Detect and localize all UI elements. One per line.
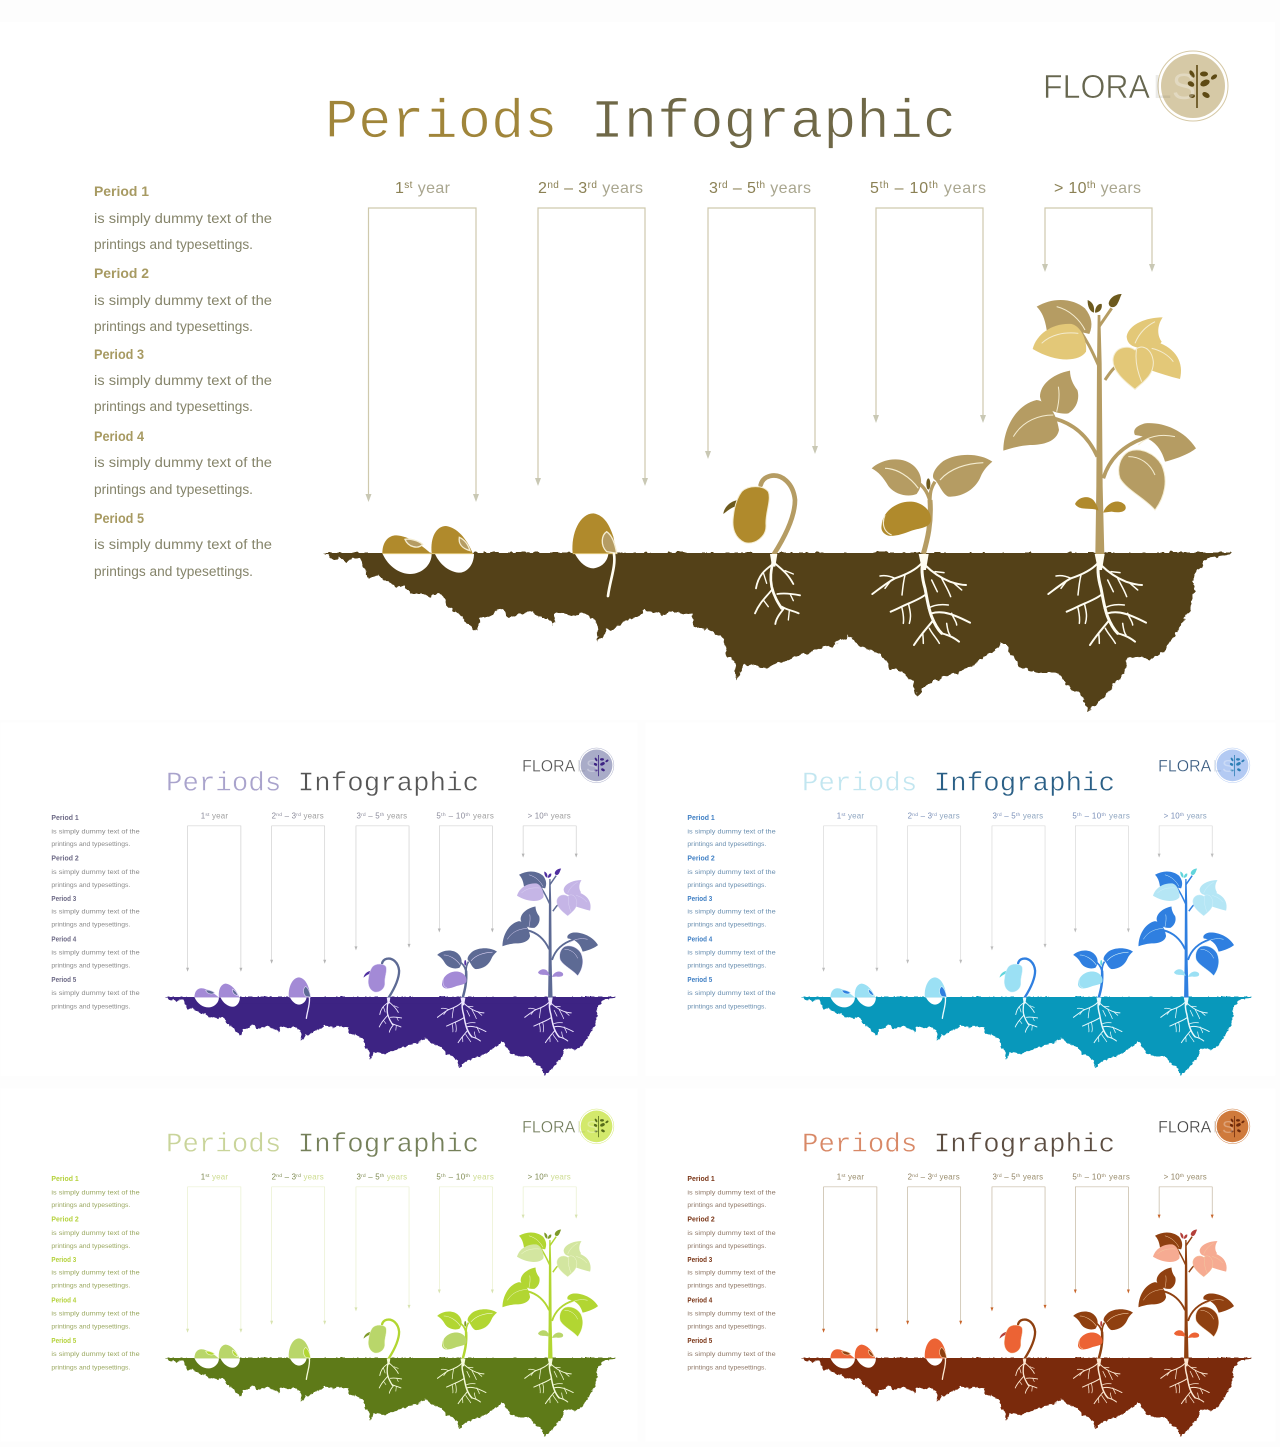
logo: S <box>1222 1117 1234 1137</box>
text block: periods: printings and typesettings. <box>687 922 766 929</box>
year headings: years <box>1106 811 1130 820</box>
soil <box>801 997 1251 1076</box>
year headings: – 5 <box>728 180 756 197</box>
plant stage 5 <box>502 869 598 1043</box>
text block: periods: printings and typesettings. <box>51 922 130 929</box>
year headings: > 10 <box>1164 1172 1180 1181</box>
logo: L <box>1213 757 1222 775</box>
text block: periods: printings and typesettings. <box>51 1364 130 1371</box>
year headings: years <box>548 1172 571 1181</box>
year headings: years <box>1184 1172 1207 1181</box>
year headings: rd <box>588 180 597 191</box>
year headings: th <box>880 180 889 191</box>
year headings: 2 <box>538 180 547 197</box>
text block: periods: is simply dummy text of the <box>51 909 140 916</box>
logo: FLORA <box>522 757 575 775</box>
panel: purple infographic <box>0 723 638 1076</box>
year headings: – 3 <box>282 1172 297 1181</box>
year headings: 2 <box>272 811 276 820</box>
text block: periods: printings and typesettings. <box>687 1202 766 1209</box>
plant stage 2 <box>925 1338 947 1379</box>
title: Periods Infographic <box>802 769 1115 800</box>
year headings: years <box>384 1172 407 1181</box>
year headings: th <box>544 1173 548 1179</box>
year headings: year <box>846 811 864 820</box>
logo: S <box>586 756 598 776</box>
text block: periods: is simply dummy text of the <box>687 828 776 835</box>
year headings: rd <box>718 180 728 191</box>
year headings: st <box>404 180 413 191</box>
text block: periods: printings and typesettings. <box>51 1324 130 1331</box>
year headings: 1 <box>837 811 842 820</box>
text block: periods: Period 2 <box>687 1217 715 1224</box>
year headings: th <box>465 812 470 818</box>
text block: periods: Period 2 <box>687 856 715 863</box>
year headings: rd <box>296 812 301 818</box>
text block: periods: printings and typesettings. <box>51 1243 130 1250</box>
panel: gold main infographic <box>0 22 1275 720</box>
text block: periods: Period 3 <box>51 896 76 903</box>
title: Periods Infographic <box>802 1130 1115 1161</box>
panel: orange infographic <box>645 1089 1275 1442</box>
year headings: 2 <box>908 811 912 820</box>
year headings: 3 <box>709 180 718 197</box>
text block: periods: Period 1 <box>51 815 79 822</box>
arrows <box>186 826 578 972</box>
plant stage 5 <box>502 1230 598 1404</box>
text block: periods: printings and typesettings. <box>94 319 253 334</box>
year headings: 2 <box>908 1172 912 1181</box>
plant stage 3 <box>723 476 800 624</box>
title: Periods Infographic <box>166 1130 479 1161</box>
plant stage 4 <box>872 455 992 645</box>
year headings: 5 <box>436 1172 441 1181</box>
year headings: 2 <box>272 1172 276 1181</box>
plant stage 3 <box>1000 1320 1038 1393</box>
plant stage 4 <box>437 948 497 1043</box>
text block: periods: printings and typesettings. <box>51 1202 130 1209</box>
text block: periods: printings and typesettings. <box>51 963 130 970</box>
year headings <box>395 180 1141 197</box>
plant stage 2 <box>289 1338 311 1379</box>
text block: periods: printings and typesettings. <box>94 399 253 414</box>
year headings <box>201 1172 571 1181</box>
year headings: years <box>548 811 571 820</box>
year headings: rd <box>997 812 1002 818</box>
text block: periods: Period 3 <box>94 346 144 362</box>
panel: blue infographic <box>645 723 1275 1076</box>
logo: L <box>1153 68 1171 105</box>
year headings: – 10 <box>1082 811 1102 820</box>
plant stage 4 <box>1073 948 1133 1043</box>
plant stage 4 <box>437 1309 497 1404</box>
soil <box>323 553 1231 712</box>
year headings: year <box>210 811 228 820</box>
soil <box>801 1358 1251 1437</box>
logo: S <box>586 1117 598 1137</box>
year headings: > 10 <box>528 1172 544 1181</box>
year headings: th <box>1077 812 1082 818</box>
text block: periods: is simply dummy text of the <box>51 1189 140 1196</box>
text block: periods: is simply dummy text of the <box>94 211 272 226</box>
logo: S <box>1222 756 1234 776</box>
text block: periods: is simply dummy text of the <box>51 1230 140 1237</box>
arrows <box>822 826 1214 972</box>
text block: periods: Period 3 <box>687 1257 712 1264</box>
year headings: st <box>205 812 210 818</box>
arrows <box>366 208 1155 502</box>
text block: periods: is simply dummy text of the <box>94 293 272 308</box>
text block: periods: Period 4 <box>687 1297 712 1304</box>
logo <box>1158 748 1250 783</box>
year headings: 3 <box>356 1172 361 1181</box>
plant stage 5 <box>1138 1230 1234 1404</box>
year headings: th <box>1087 180 1096 191</box>
year headings <box>837 1172 1207 1181</box>
soil <box>165 1358 615 1437</box>
year headings: th <box>929 180 938 191</box>
text block: periods: Period 3 <box>51 1257 76 1264</box>
plant stage 1 <box>830 1345 876 1368</box>
text block: periods: is simply dummy text of the <box>94 537 272 552</box>
plant stage 3 <box>364 959 402 1032</box>
text block: periods: Period 1 <box>687 815 715 822</box>
text block: periods: Period 5 <box>94 510 144 526</box>
year headings: 5 <box>436 811 441 820</box>
year headings: rd <box>296 1173 301 1179</box>
year headings: th <box>544 812 548 818</box>
year headings: rd <box>361 812 366 818</box>
year headings: nd <box>912 1173 918 1179</box>
logo: FLORA <box>1158 757 1211 775</box>
year headings: 3 <box>356 811 361 820</box>
text block: periods: printings and typesettings. <box>687 1003 766 1010</box>
plant stage 3 <box>1000 959 1038 1032</box>
plant stage 3 <box>364 1320 402 1393</box>
year headings: years <box>1020 1172 1043 1181</box>
text block: periods: Period 5 <box>687 977 712 984</box>
text block: periods: printings and typesettings. <box>687 963 766 970</box>
text block: periods: printings and typesettings. <box>94 482 253 497</box>
logo <box>522 1109 614 1144</box>
year headings: years <box>1020 811 1043 820</box>
logo: L <box>577 1118 586 1136</box>
plant stage 2 <box>925 977 947 1018</box>
text block: periods: Period 4 <box>687 936 712 943</box>
year headings: rd <box>932 1173 937 1179</box>
year headings: 1 <box>201 811 206 820</box>
year headings: years <box>470 811 494 820</box>
year headings: nd <box>912 812 918 818</box>
year headings: – 3 <box>918 811 933 820</box>
text block: periods: Period 5 <box>51 1338 76 1345</box>
text block: periods: printings and typesettings. <box>94 237 253 252</box>
year headings: th <box>1101 812 1106 818</box>
text block: periods: is simply dummy text of the <box>51 1351 140 1358</box>
text block: periods: Period 4 <box>94 428 144 444</box>
year headings: nd <box>276 1173 282 1179</box>
year headings: years <box>597 180 643 197</box>
year headings: 1 <box>837 1172 842 1181</box>
year headings: – 5 <box>366 811 380 820</box>
year headings: – 10 <box>889 180 928 197</box>
year headings: – 5 <box>1002 1172 1016 1181</box>
text block: periods: is simply dummy text of the <box>687 990 776 997</box>
text block: periods: Period 4 <box>51 1297 76 1304</box>
year headings: rd <box>997 1173 1002 1179</box>
panel: green infographic <box>0 1089 638 1442</box>
year headings: 1 <box>395 180 404 197</box>
plant stage 1 <box>194 984 240 1007</box>
year headings: th <box>380 812 384 818</box>
arrows <box>186 1187 578 1333</box>
logo: FLORA <box>1158 1118 1211 1136</box>
year headings: years <box>937 811 960 820</box>
text block: periods: Period 3 <box>687 896 712 903</box>
plant stage 1 <box>382 526 474 574</box>
text block: periods: printings and typesettings. <box>51 1283 130 1290</box>
title: Periods Infographic <box>325 91 956 154</box>
year headings: years <box>765 180 811 197</box>
year headings: 5 <box>870 180 879 197</box>
year headings: year <box>846 1172 864 1181</box>
text block: periods: printings and typesettings. <box>687 841 766 848</box>
year headings: 1 <box>201 1172 206 1181</box>
year headings: year <box>413 180 451 197</box>
logo: S <box>1172 66 1196 107</box>
year headings: th <box>1016 1173 1020 1179</box>
text block: periods: Period 5 <box>687 1338 712 1345</box>
year headings: – 5 <box>1002 811 1016 820</box>
year headings: years <box>937 1172 960 1181</box>
text block: periods: is simply dummy text of the <box>94 455 272 470</box>
logo: L <box>1213 1118 1222 1136</box>
plant stage 1 <box>194 1345 240 1368</box>
year headings: th <box>1180 812 1184 818</box>
text block: periods: Period 2 <box>94 265 149 281</box>
year headings: th <box>756 180 765 191</box>
text block: periods: printings and typesettings. <box>687 1364 766 1371</box>
year headings: th <box>441 812 446 818</box>
plant stage 1 <box>830 984 876 1007</box>
plant stage 4 <box>1073 1309 1133 1404</box>
text block: periods: printings and typesettings. <box>51 841 130 848</box>
year headings: – 3 <box>282 811 297 820</box>
plant stage 2 <box>572 513 617 596</box>
year headings: th <box>441 1173 446 1179</box>
text block: periods: is simply dummy text of the <box>687 1270 776 1277</box>
text block: periods: is simply dummy text of the <box>687 949 776 956</box>
year headings: st <box>841 812 846 818</box>
text block: periods: Period 1 <box>51 1176 79 1183</box>
year headings <box>837 811 1207 820</box>
text block: periods: Period 2 <box>51 856 79 863</box>
year headings: th <box>1016 812 1020 818</box>
year headings: st <box>841 1173 846 1179</box>
text block: periods: Period 1 <box>687 1176 715 1183</box>
text block: periods: is simply dummy text of the <box>687 1189 776 1196</box>
year headings: rd <box>361 1173 366 1179</box>
text block: periods: is simply dummy text of the <box>687 909 776 916</box>
text block: periods: is simply dummy text of the <box>687 1230 776 1237</box>
logo: L <box>577 757 586 775</box>
year headings: st <box>205 1173 210 1179</box>
text block: periods: printings and typesettings. <box>687 1324 766 1331</box>
text block: periods: is simply dummy text of the <box>51 828 140 835</box>
year headings <box>201 811 571 820</box>
plant stage 2 <box>289 977 311 1018</box>
text block: periods <box>687 1176 776 1371</box>
year headings: th <box>465 1173 470 1179</box>
text block: periods: printings and typesettings. <box>51 1003 130 1010</box>
logo: FLORA <box>1043 68 1150 105</box>
soil <box>165 997 615 1076</box>
year headings: years <box>939 180 986 197</box>
logo <box>1043 51 1228 121</box>
year headings: years <box>1096 180 1141 197</box>
text block: periods <box>687 815 776 1010</box>
text block: periods: Period 2 <box>51 1217 79 1224</box>
plant stage 5 <box>1003 294 1196 645</box>
year headings: years <box>384 811 407 820</box>
year headings: years <box>1106 1172 1130 1181</box>
text block: periods: is simply dummy text of the <box>687 869 776 876</box>
text block: periods: is simply dummy text of the <box>94 373 272 388</box>
arrows <box>822 1187 1214 1333</box>
text block: periods: is simply dummy text of the <box>687 1310 776 1317</box>
year headings: – 10 <box>446 811 466 820</box>
year headings: rd <box>932 812 937 818</box>
year headings: th <box>1180 1173 1184 1179</box>
year headings: years <box>1184 811 1207 820</box>
year headings: – 3 <box>918 1172 933 1181</box>
text block: periods <box>51 815 140 1010</box>
year headings: – 5 <box>366 1172 380 1181</box>
logo <box>522 748 614 783</box>
text block: periods <box>94 183 272 579</box>
text block: periods: printings and typesettings. <box>94 564 253 579</box>
year headings: 3 <box>992 811 997 820</box>
year headings: nd <box>276 812 282 818</box>
year headings: > 10 <box>1054 180 1087 197</box>
year headings: th <box>1077 1173 1082 1179</box>
year headings: 5 <box>1072 1172 1077 1181</box>
text block: periods: is simply dummy text of the <box>687 1351 776 1358</box>
year headings: years <box>301 1172 324 1181</box>
year headings: th <box>380 1173 384 1179</box>
year headings: – 10 <box>1082 1172 1102 1181</box>
plant stage 5 <box>1138 869 1234 1043</box>
year headings: year <box>210 1172 228 1181</box>
year headings: – 3 <box>559 180 587 197</box>
title: Periods Infographic <box>166 769 479 800</box>
text block: periods: Period 4 <box>51 936 76 943</box>
year headings: 5 <box>1072 811 1077 820</box>
text block: periods: Period 1 <box>94 183 149 199</box>
text block: periods <box>51 1176 140 1371</box>
text block: periods: Period 5 <box>51 977 76 984</box>
year headings: years <box>470 1172 494 1181</box>
year headings: – 10 <box>446 1172 466 1181</box>
year headings: > 10 <box>528 811 544 820</box>
text block: periods: is simply dummy text of the <box>51 1310 140 1317</box>
year headings: 3 <box>992 1172 997 1181</box>
text block: periods: is simply dummy text of the <box>51 990 140 997</box>
year headings: nd <box>547 180 559 191</box>
text block: periods: is simply dummy text of the <box>51 1270 140 1277</box>
text block: periods: printings and typesettings. <box>687 882 766 889</box>
year headings: > 10 <box>1164 811 1180 820</box>
logo <box>1158 1109 1250 1144</box>
text block: periods: printings and typesettings. <box>687 1243 766 1250</box>
text block: periods: is simply dummy text of the <box>51 869 140 876</box>
text block: periods: printings and typesettings. <box>51 882 130 889</box>
year headings: th <box>1101 1173 1106 1179</box>
text block: periods: printings and typesettings. <box>687 1283 766 1290</box>
logo: FLORA <box>522 1118 575 1136</box>
year headings: years <box>301 811 324 820</box>
text block: periods: is simply dummy text of the <box>51 949 140 956</box>
